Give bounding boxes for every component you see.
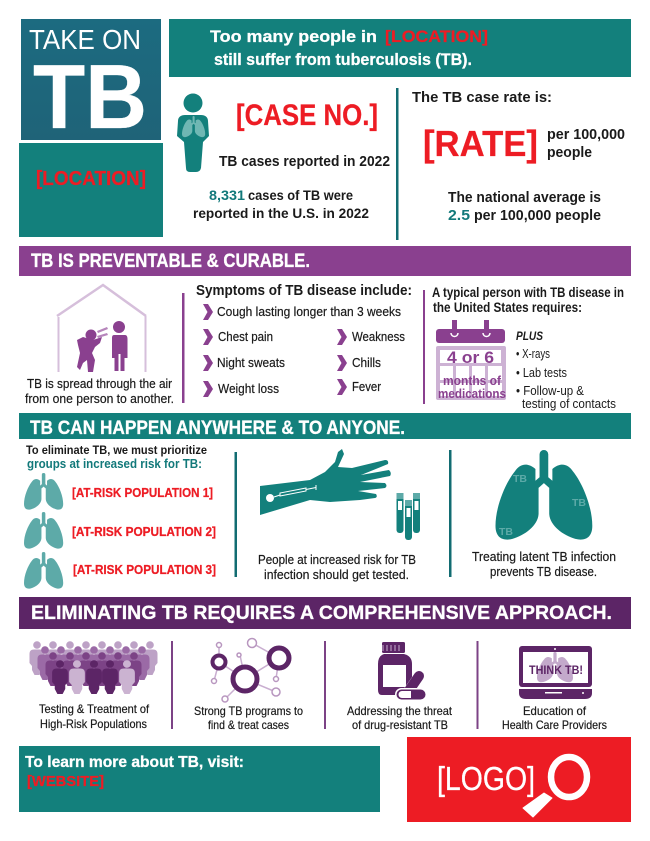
text: US cases: cases of TB were [248,188,353,203]
list: symptoms: Weight loss [218,381,279,396]
stat: case rate: per 100,000 [547,127,625,143]
stat: case number: TB cases reported in 2022 [219,153,390,170]
logo block: Take on TB: TAKE ON [29,24,141,55]
list: plus items: • Follow-up & [516,384,585,398]
panel: learn more: To learn more about TB, visit: [25,754,244,771]
icon: arm with syringe [260,449,391,515]
icon: crowd of people [30,641,158,694]
text: national average [448,190,601,224]
top banner: still suffer from tuberculosis (TB). [214,50,472,69]
list: symptoms [196,282,412,397]
list: symptoms: Night sweats [217,355,285,370]
list: plus items [516,329,616,411]
list: symptoms: Fever [352,379,382,394]
text: prioritize groups: To eliminate TB, we must prioritize [26,443,207,457]
heading band: comprehensive approach [19,597,631,629]
list: at-risk populations [24,473,216,589]
text: spread through air: TB is spread through the air [27,376,173,391]
icon: calendar 4 or 6 months [436,320,506,401]
text: national average: 2.5 [448,208,470,224]
logo block: Take on TB: TB [33,47,147,148]
text: testing and treatment: Testing & Treatment of [39,702,150,716]
text: prioritize groups: groups at increased risk for TB: [27,456,202,471]
text: drug-resistant [347,704,453,732]
list: plus items: PLUS [516,329,543,343]
list: symptoms: Symptoms of TB disease include: [196,282,412,299]
icon: large lungs with TB [496,450,592,540]
stat: case rate: The TB case rate is: [412,89,552,106]
text: prioritize groups [26,443,207,471]
text: health care providers: Health Care Providers [502,718,607,732]
text: testing and treatment: High-Risk Populations [40,717,147,731]
panel: learn more [19,746,380,812]
stat: case number [219,99,390,170]
text: US cases: reported in the U.S. in 2022 [193,206,369,221]
heading band: anywhere and anyone [19,413,631,439]
text: US cases: 8,331 [209,187,245,203]
icon: person with lungs [177,94,209,172]
text: health care providers [502,704,607,732]
list: symptoms: Chills [352,355,381,370]
list: plus items: • Lab tests [516,366,567,380]
text: treating latent TB: prevents TB disease. [490,564,597,579]
text: strong programs: Strong TB programs to [194,704,303,718]
stat: case rate: [RATE] [423,123,538,164]
heading band: comprehensive approach: ELIMINATING TB REQUIRES A COMPREHENSIVE APPROACH. [31,602,612,624]
stat: case number: [CASE NO.] [236,99,378,132]
text: typical treatment: the United States requires: [433,300,582,315]
icon: large lungs with TB: TB [572,497,586,509]
list: symptoms: Weakness [352,329,405,344]
text: spread through air [25,376,174,406]
text: strong programs [194,704,303,732]
logo block: Take on TB [21,19,161,148]
panel: logo placeholder with magnifier [407,737,631,822]
icon: calendar 4 or 6 months: 4 or 6 [447,348,494,367]
icon: calendar 4 or 6 months: medications [438,387,506,401]
icon: house with coughing person [57,285,146,372]
icon: medicine bottle and pills [378,642,427,701]
text: drug-resistant: Addressing the threat [347,704,453,718]
location box: [LOCATION] [36,168,146,190]
icon: network of rings [212,638,289,702]
top banner [169,19,631,77]
top banner: [LOCATION] [385,27,488,46]
icon: calendar 4 or 6 months: months of [443,374,502,388]
list: plus items: testing of contacts [522,397,616,411]
text: should get tested [258,552,416,582]
panel: logo placeholder with magnifier: [LOGO] [437,760,535,797]
text: should get tested: People at increased risk for TB [258,552,416,567]
list: symptoms: Cough lasting longer than 3 weeks [217,304,401,319]
icon: laptop Think TB [519,646,592,699]
text: treating latent TB: Treating latent TB infection [472,549,616,564]
list: plus items: • X-rays [516,347,550,361]
list: at-risk populations: [AT-RISK POPULATION 3] [73,563,216,577]
text: national average: per 100,000 people [474,208,601,224]
text: treating latent TB [472,549,616,579]
stat: case rate: people [547,145,592,161]
icon: large lungs with TB: TB [513,473,527,485]
heading band: anywhere and anyone: TB CAN HAPPEN ANYWHERE & TO ANYONE. [30,418,405,439]
icon: test tubes [396,493,420,540]
text: testing and treatment [39,702,150,731]
text: spread through air: from one person to another. [25,391,174,406]
stat: case rate [412,89,625,164]
icon: large lungs with TB: TB [499,526,513,538]
text: strong programs: find & treat cases [208,718,289,732]
text: health care providers: Education of [523,704,587,718]
text: typical treatment [432,285,624,315]
text: national average: The national average is [448,190,601,206]
text: US cases [193,187,369,221]
heading band: preventable and curable: TB IS PREVENTABLE & CURABLE. [31,251,310,272]
text: drug-resistant: of drug-resistant TB [352,718,448,732]
panel: learn more: [WEBSITE] [27,773,104,790]
list: symptoms: Chest pain [218,329,273,344]
location box [19,143,163,237]
list: at-risk populations: [AT-RISK POPULATION 1] [72,486,213,500]
heading band: preventable and curable [19,246,631,276]
icon: laptop Think TB: THINK TB! [529,665,583,677]
list: at-risk populations: [AT-RISK POPULATION 2] [72,525,216,539]
top banner: Too many people in [210,27,377,46]
text: should get tested: infection should get tested. [264,567,409,582]
